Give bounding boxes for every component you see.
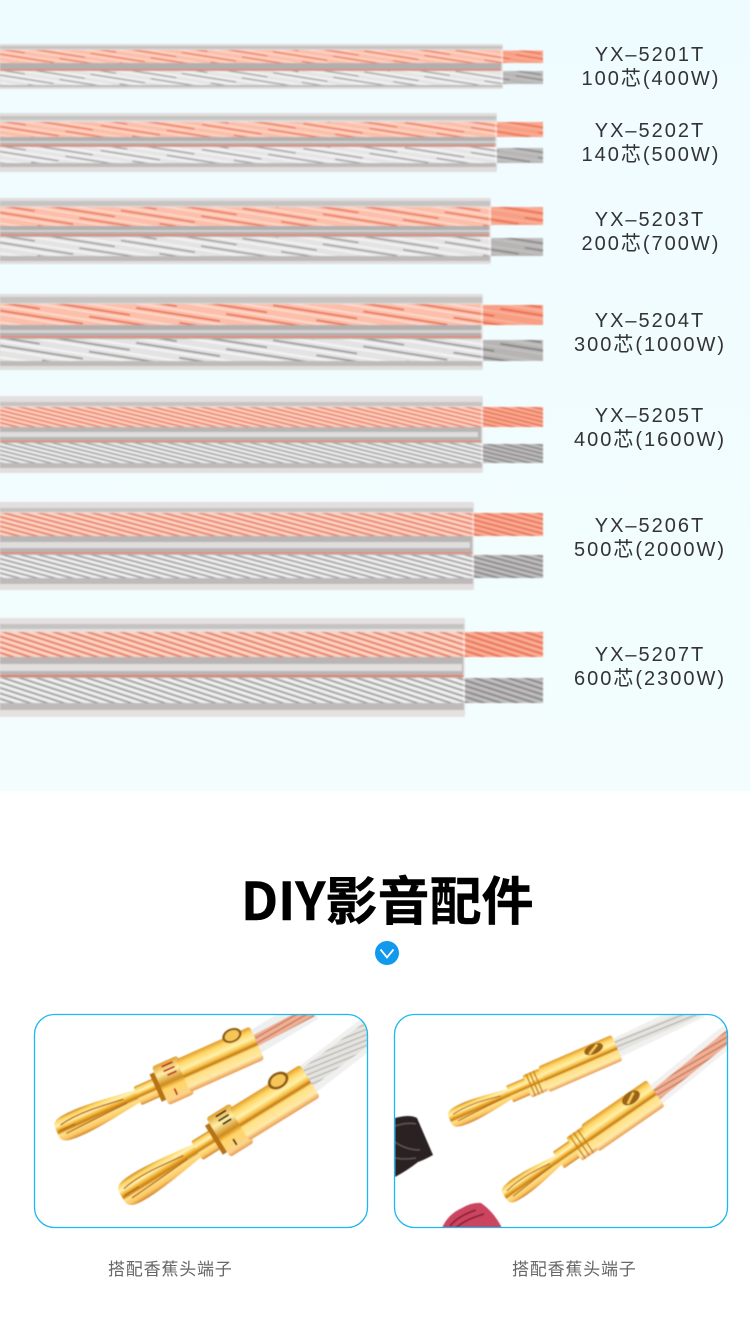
- label: YX-5206T: 500芯(2000W): [574, 538, 726, 561]
- label: YX-5204T: YX–5204T: [595, 310, 705, 332]
- panel border: [34, 1014, 368, 1228]
- label: YX-5206T: YX–5206T: [595, 515, 705, 537]
- top panel background: [0, 0, 750, 791]
- label: YX-5204T: 300芯(1000W): [574, 333, 726, 356]
- label: YX-5203T: YX–5203T: [595, 209, 705, 231]
- label: YX-5201T: YX–5201T: [595, 44, 705, 66]
- panel: gold banana plugs, screw ring type: [34, 1008, 372, 1228]
- cable row: YX-5203T: [0, 198, 543, 264]
- label: YX-5203T: [582, 209, 720, 255]
- panel border: [394, 1014, 728, 1228]
- object: black audio plug: [395, 1116, 433, 1177]
- label: YX-5203T: 200芯(700W): [582, 232, 720, 255]
- label: YX-5205T: YX–5205T: [595, 405, 705, 427]
- label: YX-5207T: YX–5207T: [595, 644, 705, 666]
- label: YX-5202T: YX–5202T: [595, 120, 705, 142]
- cable: silver wire in clear jacket: [304, 1030, 372, 1082]
- cable row: YX-5205T: [0, 396, 543, 473]
- label: YX-5205T: [574, 405, 726, 451]
- cable: copper wire in clear jacket: [652, 1030, 735, 1098]
- icon: blue chevron circle: [375, 941, 399, 965]
- heading: DIY影音配件: [241, 860, 533, 935]
- label: YX-5206T: [574, 515, 726, 561]
- label: YX-5207T: 600芯(2300W): [574, 667, 726, 690]
- plug: upper threaded connector: [444, 1035, 623, 1133]
- label: YX-5204T: [574, 310, 726, 356]
- cable row: YX-5201T: [0, 44, 543, 89]
- caption: left panel: 搭配香蕉头端子: [108, 1260, 233, 1279]
- plug: upper gold connector: [54, 1026, 264, 1142]
- cable row: YX-5207T: [0, 618, 543, 717]
- plug: lower gold connector: [118, 1065, 320, 1206]
- caption: right panel: 搭配香蕉头端子: [512, 1260, 637, 1279]
- label: YX-5201T: 100芯(400W): [582, 67, 720, 90]
- cable row: YX-5204T: [0, 294, 543, 370]
- panel: gold banana plugs, threaded type: [394, 1008, 735, 1228]
- label: YX-5202T: [582, 120, 720, 166]
- label: YX-5201T: [582, 44, 720, 90]
- object: red audio plug: [442, 1203, 502, 1228]
- label: YX-5202T: 140芯(500W): [582, 143, 720, 166]
- cable: copper wire in clear jacket: [255, 1008, 312, 1042]
- plug: lower threaded connector: [496, 1080, 665, 1210]
- cable row: YX-5206T: [0, 502, 543, 590]
- label: YX-5207T: [574, 644, 726, 690]
- cable: silver wire in clear jacket: [612, 1008, 700, 1050]
- cable row: YX-5202T: [0, 113, 543, 172]
- label: YX-5205T: 400芯(1600W): [574, 428, 726, 451]
